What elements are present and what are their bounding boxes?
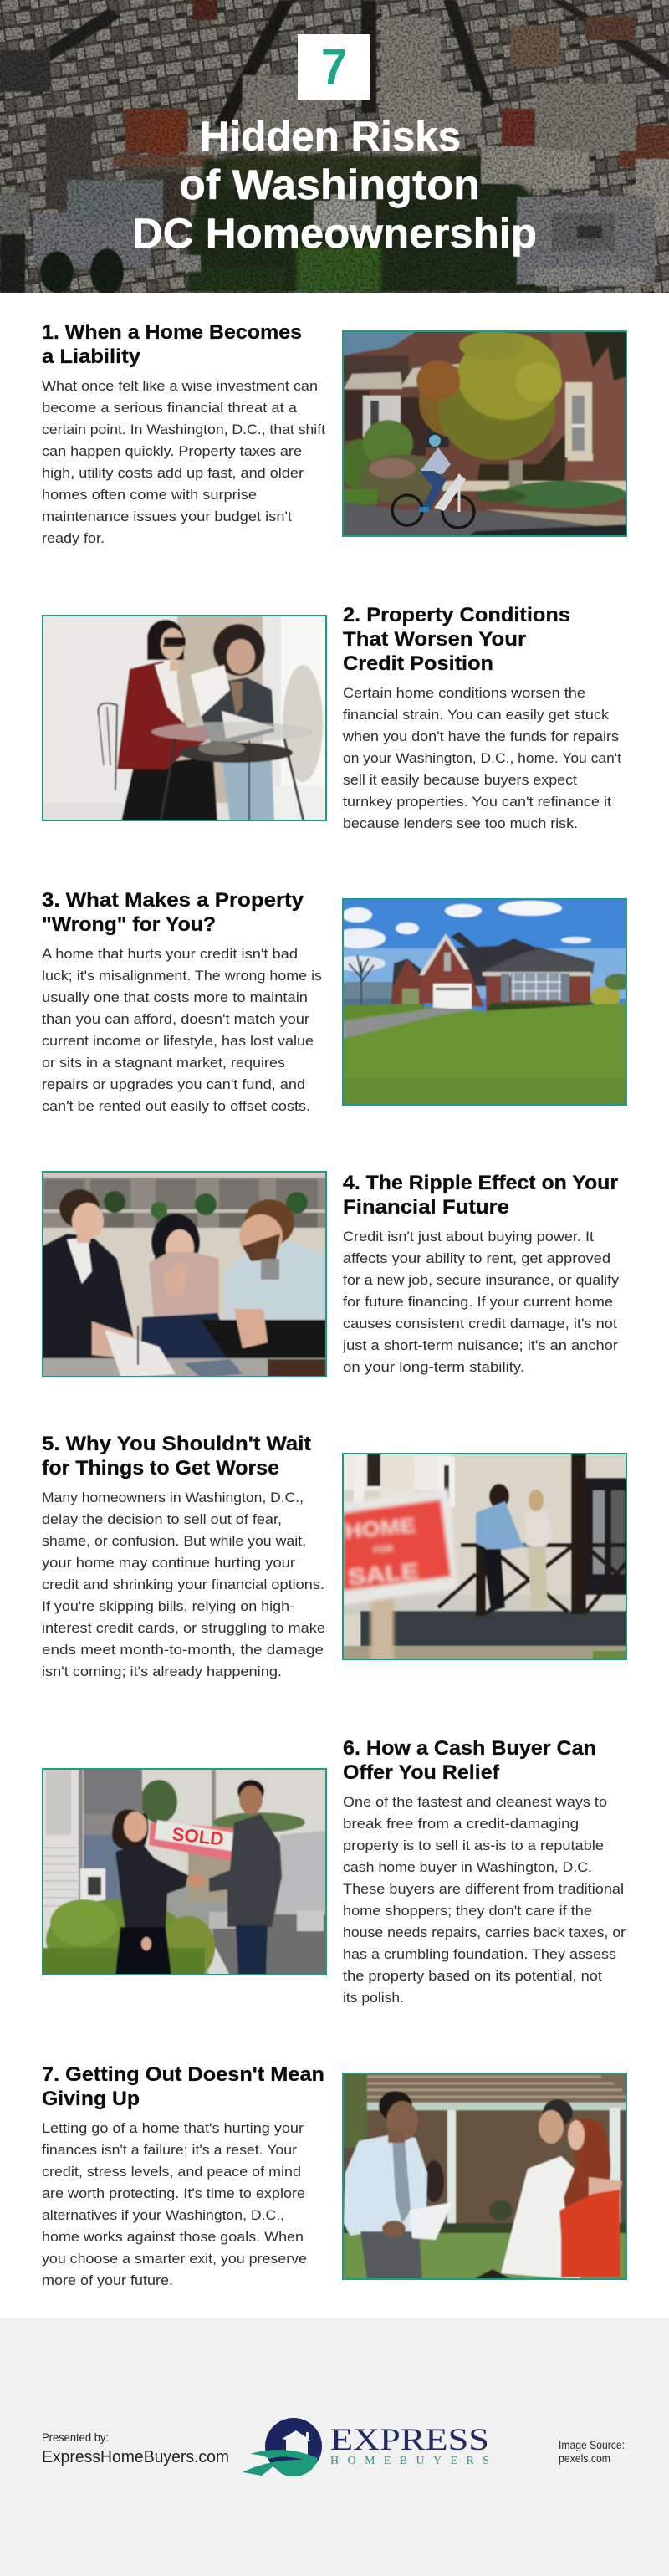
heading 4 (343, 1172, 618, 1219)
number badge: 7 (321, 38, 347, 95)
heading 7: 7. Getting Out Doesn't Mean (42, 2063, 324, 2086)
body text 7: you choose a smarter exit, you preserve (42, 2251, 307, 2267)
body text 2: when you don't have the funds for repairs (342, 728, 619, 744)
body text 3: can't be rented out easily to offset costs. (42, 1098, 310, 1114)
heading 4: 4. The Ripple Effect on Your (343, 1172, 618, 1194)
logo: Express HomeBuyers (243, 2418, 489, 2476)
body text 4: affects your ability to rent, get approved (343, 1250, 610, 1266)
body text 5: ends meet month-to-month, the damage (42, 1642, 324, 1658)
heading 5 (42, 1433, 311, 1480)
body text 6: house needs repairs, carries back taxes, or (343, 1924, 626, 1940)
photo: couple on porch behind for-sale sign (342, 1453, 627, 1660)
body text 5: credit and shrinking your financial options. (42, 1577, 324, 1592)
footer (0, 2318, 669, 2576)
body text 1: ready for. (42, 530, 105, 546)
logo mark: house in circle with green swoosh (243, 2418, 322, 2476)
number badge (298, 34, 370, 100)
body text 5: interest credit cards, or struggling to make (42, 1620, 325, 1636)
body text 3: A home that hurts your credit isn't bad (42, 946, 298, 962)
body text 4: just a short-term nuisance; it's an anchor (342, 1337, 618, 1353)
body text 1: What once felt like a wise investment can (42, 378, 318, 394)
body text 7: home works against those goals. When (42, 2229, 304, 2245)
body text 6: One of the fastest and cleanest ways to (343, 1794, 607, 1810)
body text 1: become a serious financial threat at a (42, 400, 298, 416)
body text 5: isn't coming; it's already happening. (42, 1664, 282, 1679)
body text 1: maintenance issues your budget isn't (42, 509, 292, 524)
body text 2: on your Washington, D.C., home. You can't (343, 750, 621, 766)
body text 1: homes often come with surprise (42, 487, 257, 503)
body text 2: because lenders see too much risk. (343, 815, 578, 831)
body text 6: has a crumbling foundation. They assess (343, 1946, 616, 1962)
heading 3: 3. What Makes a Property (42, 889, 304, 912)
body text 5: Many homeowners in Washington, D.C., (42, 1490, 304, 1505)
park (188, 155, 544, 293)
body text 5: If you're skipping bills, relying on high- (42, 1598, 294, 1614)
photo: couple on porch behind for-sale sign: FOR (373, 1544, 393, 1556)
panel: section 6 (42, 1737, 626, 2006)
body text 3: than you can afford, doesn't match your (42, 1011, 309, 1027)
body text 3: or sits in a stagnant market, requires (42, 1055, 285, 1071)
body text 3: current income or lifestyle, has lost value (42, 1033, 314, 1049)
logo wordmark: HOMEBUYERS (330, 2455, 489, 2467)
body text 1 (42, 378, 325, 546)
body text 6 (343, 1794, 626, 2006)
body text 7: credit, stress levels, and peace of mind (42, 2164, 301, 2180)
heading 1 (42, 321, 302, 368)
body text 3: usually one that costs more to maintain (42, 989, 308, 1005)
heading 2: That Worsen Your (343, 628, 526, 651)
panel: section 2 (42, 604, 621, 831)
photo: two women reviewing papers (42, 615, 327, 821)
body text 7: more of your future. (42, 2272, 173, 2288)
body text 6: its polish. (343, 1990, 404, 2006)
logo wordmark (330, 2423, 489, 2467)
photo: brick house with lawn (342, 898, 627, 1106)
title: of Washington (179, 161, 480, 208)
presented by credit: Presented by: (42, 2430, 109, 2444)
heading 7: Giving Up (42, 2088, 140, 2110)
heading 5: for Things to Get Worse (42, 1457, 279, 1480)
body text 4: causes consistent credit damage, it's not (343, 1316, 617, 1331)
body text 4: on your long-term stability. (343, 1359, 524, 1375)
body text 2: sell it easily because buyers expect (343, 772, 577, 788)
heading 5: 5. Why You Shouldn't Wait (42, 1433, 311, 1455)
body text 3: repairs or upgrades you can't fund, and (42, 1076, 305, 1092)
heading 6: Offer You Relief (343, 1761, 500, 1784)
photo: agent talking with couple outside house (342, 2073, 627, 2280)
body text 5 (42, 1490, 325, 1679)
body text 7: alternatives if your Washington, D.C., (42, 2207, 284, 2223)
body text 2 (342, 685, 621, 831)
cyclist (392, 435, 474, 528)
photo: cyclist passing brick house (342, 330, 627, 537)
body text 2: financial strain. You can easily get stuck (343, 707, 610, 723)
body text 3 (42, 946, 322, 1114)
body text 4: for a new job, secure insurance, or qualify (343, 1272, 620, 1288)
header banner (0, 0, 669, 295)
heading 2 (343, 604, 570, 675)
body text 6: cash home buyer in Washington, D.C. (343, 1859, 592, 1875)
photo: handshake in front of sold sign: SOLD (171, 1823, 225, 1849)
image source credit: Image Source: (559, 2439, 625, 2451)
body text 6: property is to sell it as-is to a reputable (343, 1837, 604, 1853)
body text 4: Credit isn't just about buying power. It (343, 1229, 594, 1245)
body text 6: break free from a credit-damaging (343, 1816, 579, 1832)
body text 2: turnkey properties. You can't refinance it (343, 794, 611, 810)
body text 1: certain point. In Washington, D.C., that shift (42, 422, 325, 437)
image source credit: pexels.com (559, 2452, 610, 2465)
heading 3: "Wrong" for You? (42, 913, 216, 936)
heading 2: Credit Position (343, 652, 493, 675)
presented by credit (42, 2430, 229, 2466)
photo: couple meeting an advisor (42, 1171, 327, 1377)
body text 7: Letting go of a home that's hurting your (42, 2120, 304, 2136)
heading 4: Financial Future (343, 1196, 509, 1219)
body text 5: delay the decision to sell out of fear, (42, 1511, 282, 1527)
photo: couple on porch behind for-sale sign: HOME (344, 1515, 416, 1543)
heading 2: 2. Property Conditions (343, 604, 570, 626)
body text 1: high, utility costs add up fast, and older (42, 465, 304, 481)
body text 7: finances isn't a failure; it's a reset. Your (42, 2142, 297, 2158)
panel: section 4 (42, 1171, 620, 1377)
body text 2: Certain home conditions worsen the (343, 685, 585, 701)
photo: couple on porch behind for-sale sign: SALE (347, 1559, 420, 1590)
body text 7: are worth protecting. It's time to explore (42, 2185, 305, 2201)
title (132, 113, 537, 257)
body text 4: for future financing. If your current home (343, 1294, 613, 1310)
heading 3 (42, 889, 304, 936)
heading 6 (343, 1737, 596, 1784)
heading 1: 1. When a Home Becomes (42, 321, 302, 344)
body text 5: shame, or confusion. But while you wait, (42, 1533, 306, 1549)
title: DC Homeownership (132, 210, 537, 257)
body text 7 (42, 2120, 307, 2288)
body text 5: your home may continue hurting your (42, 1555, 295, 1571)
heading 1: a Liability (42, 345, 140, 368)
body text 6: the property based on its potential, not (343, 1968, 602, 1984)
photo: handshake in front of sold sign (42, 1768, 327, 1975)
logo wordmark: EXPRESS (330, 2423, 489, 2457)
body text 1: can happen quickly. Property taxes are (42, 443, 302, 459)
presented by credit: ExpressHomeBuyers.com (42, 2448, 229, 2466)
panel: section 5 (42, 1433, 627, 1679)
body text 6: These buyers are different from traditional (343, 1881, 624, 1897)
aerial city photo (0, 0, 669, 293)
body text 3: luck; it's misalignment. The wrong home is (42, 968, 322, 984)
body text 6: home shoppers; they don't care if the (343, 1903, 592, 1919)
heading 7 (42, 2063, 324, 2110)
heading 6: 6. How a Cash Buyer Can (343, 1737, 596, 1760)
panel: section 7 (42, 2063, 627, 2288)
title: Hidden Risks (200, 113, 461, 160)
panel: section 3 (42, 889, 631, 1114)
panel: section 1 (42, 321, 627, 546)
body text 4 (342, 1229, 620, 1375)
image source credit (559, 2439, 625, 2465)
